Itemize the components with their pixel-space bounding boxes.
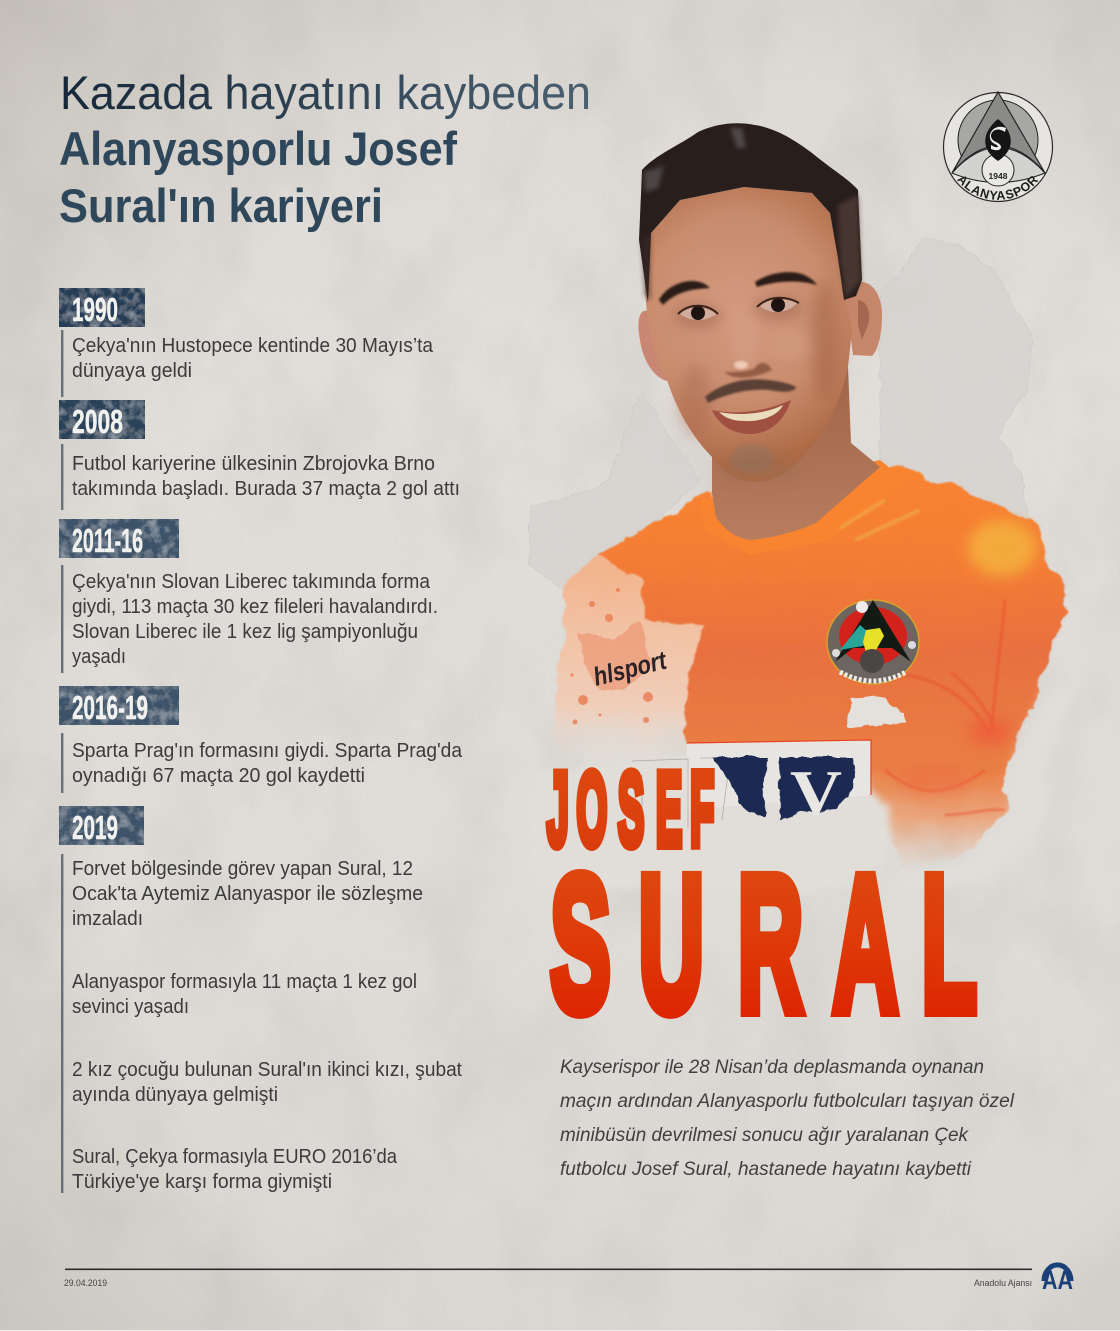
text 2016-19: Sparta Prag'ın formasını giydi. Sparta Prag'da [72, 740, 463, 762]
text 2011-16: yaşadı [72, 646, 126, 668]
shirt: collar base [700, 460, 905, 555]
shirt: orange blotch and splatter [570, 588, 653, 724]
chin stubble [730, 444, 774, 472]
timeline: 2011-16 [59, 519, 438, 673]
year badge 2011-16: 2011-16 [72, 522, 143, 559]
source: Anadolu Ajansı [974, 1278, 1032, 1288]
text 2019 paragraphs: Ocak'ta Aytemiz Alanyaspor ile sözleşme [72, 883, 423, 905]
text 1990: dünyaya geldi [72, 360, 192, 382]
text 1990 [72, 335, 434, 382]
text 2019 paragraphs: imzaladı [72, 908, 143, 930]
club name on arc: ALANYASPOR [957, 176, 1038, 200]
text 1990: Çekya'nın Hustopece kentinde 30 Mayıs’ta [72, 335, 434, 357]
title line 1: Kazada hayatını kaybeden [60, 66, 591, 119]
icon: Anadolu Agency logo: AA [1042, 1265, 1073, 1295]
nose [725, 361, 772, 378]
portrait illustration [530, 123, 1073, 890]
text 2019 paragraphs: 2 kız çocuğu bulunan Sural'ın ikinci kızı, şubat [72, 1059, 462, 1081]
jersey club badge [827, 600, 919, 684]
text 2019 paragraphs: Türkiye'ye karşı forma giymişti [72, 1171, 332, 1193]
hair [639, 123, 862, 303]
text 2019 paragraphs: Sural, Çekya formasıyla EURO 2016’da [72, 1146, 398, 1168]
text 2016-19: oynadığı 67 maçta 20 gol kaydetti [72, 765, 365, 787]
shirt: faded peach sleeve [553, 553, 720, 775]
timeline: 2008 [59, 400, 460, 510]
summary paragraph: minibüsün devrilmesi sonucu ağır yaralanan Çek [560, 1124, 969, 1146]
text 2019 paragraphs: ayında dünyaya gelmişti [72, 1084, 278, 1106]
text 2011-16: Slovan Liberec ile 1 kez lig şampiyonluğu [72, 621, 418, 643]
shirt: collar highlights [840, 500, 920, 540]
summary paragraph: maçın ardından Alanyasporlu futbolcuları taşıyan özel [560, 1090, 1015, 1112]
text 2019 paragraphs: Forvet bölgesinde görev yapan Sural, 12 [72, 858, 413, 880]
shirt: red brush streaks [885, 600, 1005, 815]
ear left [638, 311, 667, 381]
club logo: Alanyaspor [942, 90, 1054, 202]
stamp outlines [632, 758, 730, 828]
eyes [678, 298, 799, 320]
shirt: main orange body [601, 467, 1073, 870]
title line 3: Sural'ın kariyeri [59, 179, 383, 232]
timeline: 2016-19 [59, 686, 463, 793]
name: JOSEF: JOSEF [547, 751, 714, 867]
text 2011-16: giydi, 113 maçta 30 kez fileleri havalandırdı. [72, 596, 438, 618]
text 2008: takımında başladı. Burada 37 maçta 2 gol attı [72, 478, 460, 500]
text 2008 [72, 453, 460, 500]
face [645, 187, 852, 482]
summary paragraph: futbolcu Josef Sural, hastanede hayatını kaybetti [560, 1158, 972, 1180]
ear right [846, 282, 882, 356]
facial shadows [674, 205, 839, 479]
navy print fragments [711, 757, 855, 820]
text 2019 paragraphs: sevinci yaşadı [72, 996, 189, 1018]
jersey sponsor text: hlsport [590, 645, 670, 692]
founding year: 1948 [989, 171, 1008, 181]
text 2019 paragraphs [72, 858, 462, 1193]
torn poster card [530, 740, 892, 890]
watercolor stain behind portrait [530, 238, 1060, 600]
timeline: 1990 [59, 288, 434, 397]
footer [64, 1265, 1073, 1295]
neck [712, 367, 880, 540]
text 2011-16 [72, 571, 438, 668]
text 2011-16: Çekya'nın Slovan Liberec takımında forma [72, 571, 431, 593]
shirt: feathered lower edge [900, 690, 1062, 885]
year badge 2019: 2019 [72, 809, 118, 846]
text 2016-19 [72, 740, 463, 787]
mouth [712, 400, 791, 434]
moustache [705, 379, 796, 403]
title line 2: Alanyasporlu Josef [59, 122, 457, 175]
main title [59, 66, 591, 232]
shirt: white paper gap [846, 696, 905, 730]
summary paragraph [560, 1056, 1015, 1180]
name: SURAL: SURAL [550, 836, 977, 1051]
summary paragraph: Kayserispor ile 28 Nisan’da deplasmanda oynanan [560, 1056, 984, 1078]
year badge 1990: 1990 [72, 291, 118, 328]
eyebrows [659, 272, 817, 305]
text 2008: Futbol kariyerine ülkesinin Zbrojovka Brno [72, 453, 435, 475]
shirt: yellow shoulder highlight [968, 520, 1036, 576]
text 2019 paragraphs: Alanyaspor formasıyla 11 maçta 1 kez gol [72, 971, 417, 993]
timeline: 2019 [59, 806, 462, 1193]
date: 29.04.2019 [64, 1278, 107, 1288]
year badge 2008: 2008 [72, 403, 123, 440]
year badge 2016-19: 2016-19 [72, 689, 148, 726]
letter V on card: V [790, 757, 842, 828]
